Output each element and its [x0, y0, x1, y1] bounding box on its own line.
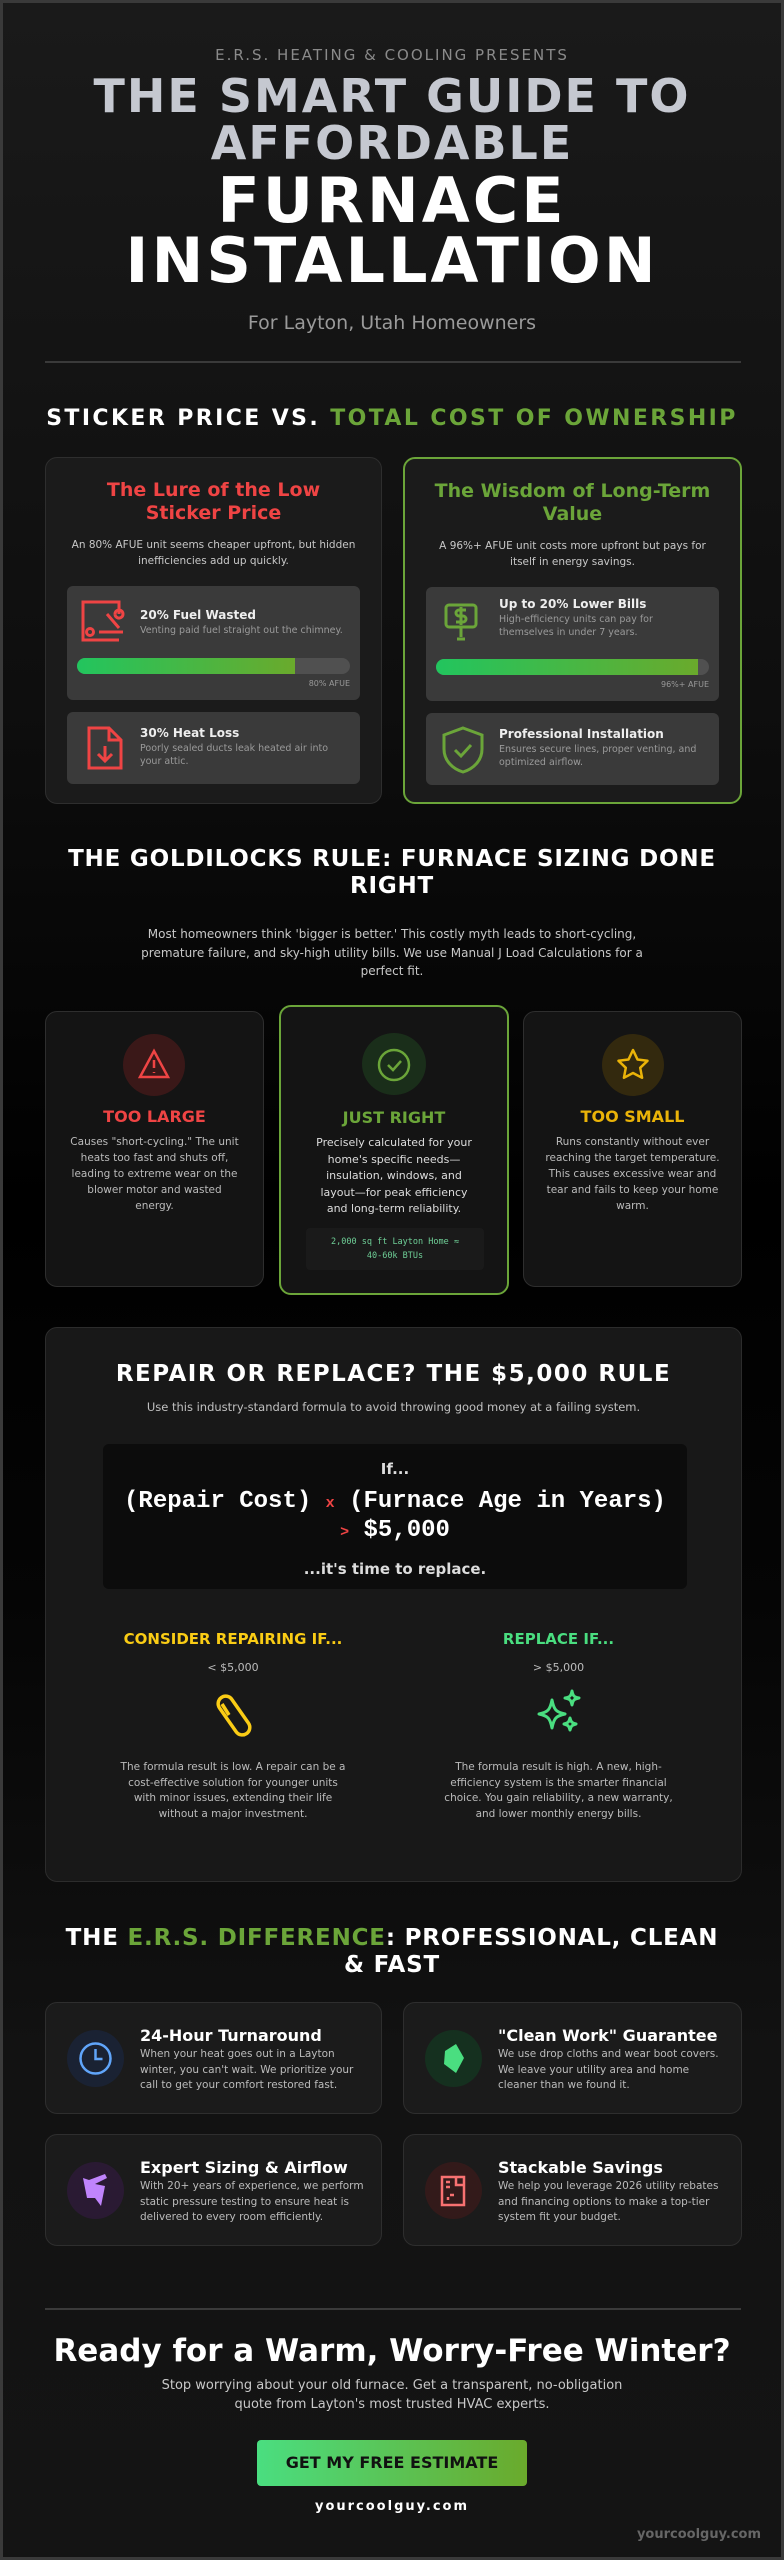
- card title: The Lure of the Low: [107, 479, 320, 501]
- card: too small: [523, 1011, 742, 1287]
- panel: long-term value: A 96%+ AFUE unit costs more upfront but pays for itself in energy savings.: [439, 540, 706, 568]
- cta button: [257, 2440, 527, 2486]
- box: lower bills: High-efficiency units can pay for themselves in under 7 years.: [499, 614, 653, 638]
- callout: btu estimate: [306, 1228, 484, 1270]
- heading: REPAIR OR REPLACE? THE $5,000 RULE: [116, 1361, 671, 1387]
- icon: clock: [67, 2030, 124, 2087]
- card: clean work: [403, 2002, 742, 2114]
- cta heading: Ready for a Warm, Worry-Free Winter?: [53, 2333, 731, 2369]
- card: clean work: We use drop cloths and wear boot covers. We leave your utility area and home cleaner than we found it.: [498, 2048, 719, 2091]
- subtitle: For Layton, Utah Homeowners: [248, 312, 536, 334]
- bar chart: 80% afue: [77, 658, 350, 674]
- icon: furnace: [82, 600, 124, 642]
- header eyebrow: E.R.S. HEATING & COOLING PRESENTS: [215, 46, 569, 64]
- icon: star: [602, 1034, 664, 1096]
- callout: btu estimate: 40-60k BTUs: [367, 1251, 423, 1261]
- box: heat loss: Poorly sealed ducts leak heated air into your attic.: [140, 743, 328, 767]
- card description: An 80% AFUE unit seems cheaper upfront, but hidden inefficiencies add up quickly.: [72, 539, 355, 567]
- heading: sticker price: STICKER PRICE VS. TOTAL COST OF OWNERSHIP: [46, 406, 738, 431]
- card: 24-hour: 24-Hour Turnaround: [140, 2026, 322, 2045]
- box: professional installation: Ensures secure lines, proper venting, and optimized airflow.: [499, 744, 696, 768]
- column: repair: < $5,000: [207, 1661, 259, 1674]
- heading: ers difference: THE E.R.S. DIFFERENCE: PROFESSIONAL, CLEAN: [66, 1925, 718, 1951]
- icon: sparkles: [538, 1690, 580, 1732]
- card: expert sizing: [45, 2134, 382, 2246]
- card: 24-hour: [45, 2002, 382, 2114]
- box: fuel wasted: Venting paid fuel straight out the chimney.: [140, 625, 343, 636]
- panel: repair or replace: Use this industry-standard formula to avoid throwing good money at a failing system.: [147, 1400, 640, 1414]
- icon: airflow: [67, 2162, 124, 2219]
- card title: [106, 479, 320, 524]
- heading: ers difference: [66, 1925, 718, 1978]
- card: too large: TOO LARGE: [103, 1107, 206, 1126]
- panel: low sticker price: [45, 457, 382, 804]
- title: INSTALLATION: [125, 224, 659, 297]
- card: too large: [45, 1011, 264, 1287]
- card: 24-hour: When your heat goes out in a Layton winter, you can't wait. We prioritize your call to get your comfort restored fast.: [140, 2048, 353, 2091]
- cta paragraph: Stop worrying about your old furnace. Get a transparent, no-obligation quote from Layton's most trusted HVAC experts.: [162, 2378, 622, 2412]
- formula box: > $5,000: [340, 1517, 450, 1544]
- card title: Sticker Price: [146, 502, 281, 524]
- card: stackable savings: We help you leverage 2026 utility rebates and financing options to make a top-tier system fit your budget.: [498, 2180, 718, 2223]
- box: lower bills: [426, 587, 719, 701]
- card: too large: Causes "short-cycling." The unit heats too fast and shuts off, leading to extreme wear on the blower motor and wasted energy.: [70, 1136, 239, 1212]
- box: lower bills: 96%+ AFUE: [661, 680, 709, 689]
- card: stackable savings: Stackable Savings: [498, 2158, 663, 2177]
- watermark: yourcoolguy.com: [637, 2527, 761, 2542]
- box: professional installation: Professional Installation: [499, 727, 664, 741]
- formula box: ...it's time to replace.: [304, 1560, 486, 1578]
- panel: long-term value: The Wisdom of Long-Term: [435, 480, 710, 502]
- column: repair: The formula result is low. A repair can be a cost-effective solution for younger units with minor issues, extending their life without a major investment.: [121, 1761, 345, 1820]
- box: professional installation: [426, 713, 719, 785]
- card: too small: TOO SMALL: [581, 1107, 684, 1126]
- box: fuel wasted: 20% Fuel Wasted: [140, 608, 256, 622]
- column: repair: [120, 1630, 345, 1820]
- card: just right: Precisely calculated for your home's specific needs—insulation, windows, and layout—for peak efficiency and long-term reliability.: [316, 1136, 472, 1215]
- formula box: If...: [381, 1460, 409, 1478]
- icon: check: [362, 1033, 426, 1095]
- callout: btu estimate: 2,000 sq ft Layton Home ≈: [331, 1237, 459, 1247]
- box: lower bills: Up to 20% Lower Bills: [499, 597, 646, 611]
- card: clean work: "Clean Work" Guarantee: [498, 2026, 717, 2045]
- card: too small: Runs constantly without ever reaching the target temperature. This causes excessive wear and tear and fails to keep your home warm.: [545, 1136, 720, 1212]
- card: stackable savings: [403, 2134, 742, 2246]
- icon: warning: [123, 1034, 185, 1096]
- icon: document: [425, 2162, 482, 2219]
- formula box: (Repair Cost) x (Furnace Age in Years): [124, 1488, 666, 1515]
- title: [94, 69, 690, 297]
- card: just right: [279, 1005, 509, 1295]
- column: replace: The formula result is high. A new, high-efficiency system is the smarter financial choice. You gain reliability, a new warranty, and lower monthly energy bills.: [444, 1761, 673, 1820]
- column: replace: [444, 1630, 673, 1820]
- panel: long-term value: [403, 457, 742, 804]
- icon: bandage: [216, 1694, 252, 1737]
- column: replace: > $5,000: [533, 1661, 584, 1674]
- heading: ers difference: & FAST: [344, 1952, 440, 1978]
- column: repair: CONSIDER REPAIRING IF...: [124, 1630, 342, 1648]
- title: FURNACE: [217, 164, 567, 237]
- icon: money: [444, 604, 478, 640]
- bar chart: 96% afue: [436, 659, 709, 675]
- box: fuel wasted: 80% AFUE: [309, 679, 350, 688]
- card: just right: JUST RIGHT: [343, 1108, 445, 1127]
- website: yourcoolguy.com: [315, 2499, 469, 2514]
- box: fuel wasted: [67, 586, 360, 700]
- icon: shield: [442, 726, 484, 774]
- formula box: [103, 1444, 687, 1589]
- icon: file down: [88, 726, 122, 770]
- icon: leaf: [425, 2030, 482, 2087]
- card: expert sizing: Expert Sizing & Airflow: [140, 2158, 348, 2177]
- column: replace: REPLACE IF...: [503, 1630, 614, 1648]
- panel: repair or replace: [45, 1327, 742, 1882]
- cta button: GET MY FREE ESTIMATE: [286, 2453, 498, 2472]
- card: expert sizing: With 20+ years of experience, we perform static pressure testing to ensure heat is delivered to every room efficiently.: [140, 2180, 364, 2223]
- title: AFFORDABLE: [211, 116, 573, 170]
- panel: long-term value: Value: [543, 503, 602, 525]
- title: THE SMART GUIDE TO: [94, 69, 690, 123]
- box: heat loss: 30% Heat Loss: [140, 726, 239, 740]
- box: heat loss: [67, 712, 360, 784]
- intro paragraph: Most homeowners think 'bigger is better.' This costly myth leads to short-cycling, premature failure, and sky-high utility bills. We use Manual J Load Calculations for a perfect fit.: [141, 927, 643, 978]
- heading: goldilocks: THE GOLDILOCKS RULE: FURNACE SIZING DONE RIGHT: [68, 846, 716, 899]
